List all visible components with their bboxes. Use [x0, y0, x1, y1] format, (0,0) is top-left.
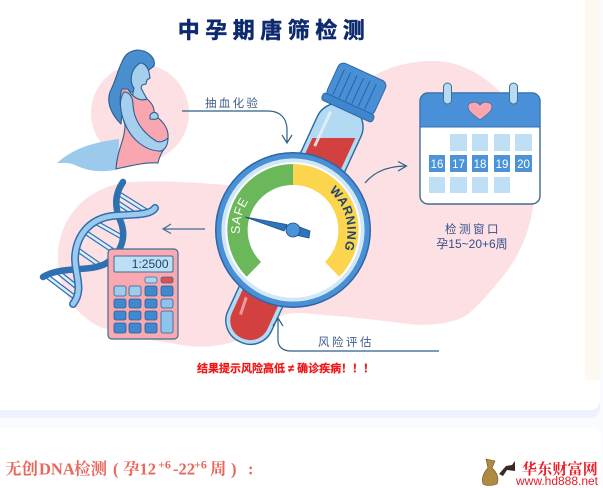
head and neck: [131, 63, 150, 103]
icon: blood tube: [225, 62, 386, 346]
strand back: [43, 182, 123, 277]
logo name: 华东财富网: [522, 460, 598, 478]
icon: calendar: 19: [496, 159, 508, 171]
icon: calculator: 1:2500: [132, 257, 169, 271]
icon: hand: [499, 461, 515, 476]
icon: DNA helix: [43, 182, 155, 304]
logo url: www.hd888.net: [515, 476, 599, 488]
heading: NIPT: DNA: [39, 460, 75, 478]
label: risk assessment: 风险评估: [318, 335, 374, 349]
cap: [325, 61, 388, 116]
arrow: blood draw to tube: [182, 111, 292, 143]
pink background blobs: [58, 61, 536, 347]
icon: calendar: 16: [431, 159, 443, 171]
text: detection window: 孕15~20+6周: [436, 237, 508, 251]
heading: NIPT: ): [231, 460, 236, 478]
heading: NIPT: 无创: [5, 460, 38, 478]
icon: calendar: 20: [517, 159, 530, 171]
tube highlight: [315, 112, 331, 146]
heading: NIPT: 周: [210, 460, 226, 478]
strand front: [73, 208, 155, 304]
display: [114, 256, 173, 272]
text: detection window: [436, 222, 508, 251]
scarf: [57, 139, 119, 171]
heading: NIPT: :: [248, 460, 254, 478]
rungs: [48, 195, 148, 296]
arrow: gauge to calculator: [163, 224, 205, 234]
icon: calendar: [420, 83, 540, 204]
heading: NIPT: 检测: [74, 458, 107, 478]
heading: NIPT: (: [113, 460, 118, 478]
hand on belly: [150, 112, 158, 119]
arrow: risk assessment to gauge: [273, 318, 439, 351]
tube body: [218, 96, 371, 352]
blood: [230, 138, 356, 340]
heading: NIPT: +6: [158, 458, 171, 472]
heading: NIPT: 孕12: [123, 460, 156, 478]
dress: [116, 89, 168, 169]
panel: next section card: [0, 428, 601, 488]
icon: money bag: [482, 459, 498, 486]
watermark logo: [482, 459, 599, 488]
needle: [245, 217, 310, 238]
hair: [109, 50, 154, 124]
chart: risk gauge: WARNING: [330, 184, 356, 250]
heading: NIPT: +6: [194, 458, 207, 472]
chart: risk gauge: [215, 152, 371, 308]
icon: calculator: [108, 249, 178, 339]
text: detection window: 检测窗口: [445, 222, 501, 236]
heading: NIPT: -22: [173, 460, 195, 478]
icon: calendar: 18: [474, 159, 486, 171]
gauge labels: SAFE: [231, 198, 248, 234]
title: 中孕期唐筛检测: [178, 18, 370, 43]
icon: pregnant woman: [57, 50, 168, 171]
icon: calendar: 17: [452, 159, 465, 171]
arm: [120, 92, 168, 151]
arrow: tube to calendar: [365, 162, 406, 183]
label: blood draw: 抽血化验: [205, 96, 260, 110]
warning note: 结果提示风险高低 ≠ 确诊疾病！！！: [197, 361, 374, 375]
safe arc: [227, 164, 293, 277]
warning arc: [293, 164, 359, 277]
